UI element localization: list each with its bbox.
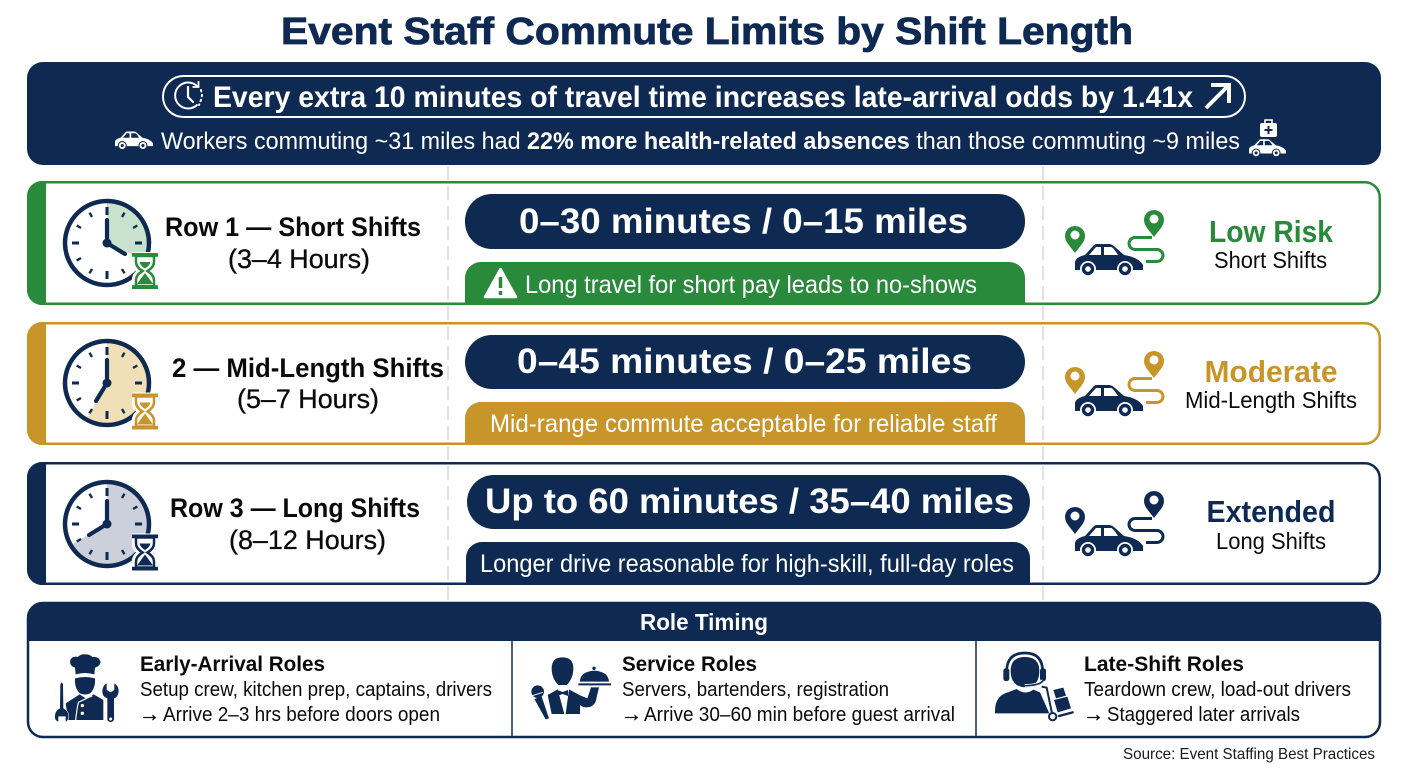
icon: clock with arrow [175, 81, 202, 109]
service roles text: Servers, bartenders, registration [622, 679, 889, 701]
panel: row 1 short shifts [27, 181, 1380, 305]
risk label [1209, 214, 1334, 273]
icon: warning [485, 269, 516, 297]
late-shift text: Teardown crew, load-out drivers [1084, 679, 1351, 701]
risk label: Mid-Length Shifts [1185, 387, 1357, 413]
panel: key statistics banner [27, 62, 1381, 165]
note tab: Long travel for short pay leads to no-shows [525, 271, 977, 299]
shift label: Row 1 — Short Shifts [165, 212, 421, 242]
shift label [165, 212, 421, 274]
panel: row 3 long shifts [27, 462, 1380, 585]
late-shift text [1083, 653, 1351, 726]
note tab [465, 262, 1025, 304]
risk label [1185, 354, 1357, 413]
late-shift text: Staggered later arrivals [1107, 704, 1300, 726]
shift label: (3–4 Hours) [228, 244, 370, 274]
early-arrival text: Arrive 2–3 hrs before doors open [163, 704, 440, 726]
icon: headset worker with hand truck [995, 653, 1073, 720]
service roles text: Arrive 30–60 min before guest arrival [644, 704, 955, 726]
risk label: Extended [1206, 494, 1336, 529]
shift label: 2 — Mid-Length Shifts [172, 353, 444, 383]
early-arrival text: → [139, 703, 160, 726]
commute limit pill [467, 475, 1030, 529]
callout: late-arrival odds: Every extra 10 minutes of travel time increases late-arrival odds by 1.41x [213, 81, 1193, 114]
shift label [172, 353, 444, 414]
icon: up arrow [1206, 85, 1229, 108]
icon: clock 4 hours [65, 201, 158, 289]
service roles text [621, 653, 955, 726]
commute limit pill: Up to 60 minutes / 35–40 miles [485, 482, 1014, 521]
icon: server with cloche and microphone [531, 657, 611, 719]
note tab [466, 542, 1030, 584]
early-arrival text: Setup crew, kitchen prep, captains, drivers [140, 679, 492, 701]
note tab [465, 402, 1025, 444]
late-shift text: Late-Shift Roles [1084, 653, 1244, 676]
early-arrival text [139, 653, 492, 726]
icon: route and car [1065, 210, 1164, 277]
early-arrival text: Early-Arrival Roles [140, 653, 325, 676]
icon: clock 7 hours [65, 341, 158, 430]
risk label: Short Shifts [1214, 247, 1327, 273]
commute limit pill [465, 194, 1025, 249]
note tab: Longer drive reasonable for high-skill, full-day roles [480, 550, 1014, 578]
risk label: Low Risk [1209, 214, 1334, 249]
panel: role timing [27, 602, 1381, 737]
icon: route and car [1065, 351, 1164, 418]
risk label [1206, 494, 1336, 554]
note tab: Mid-range commute acceptable for reliable staff [490, 410, 997, 438]
icon: car with medical bag [1249, 120, 1286, 157]
title: Event Staff Commute Limits by Shift Length [281, 11, 1133, 53]
commute limit pill: 0–30 minutes / 0–15 miles [519, 202, 968, 241]
commute limit pill [465, 335, 1025, 389]
risk label: Moderate [1204, 354, 1338, 389]
icon: route and car [1065, 491, 1164, 558]
panel: row 2 mid-length shifts [27, 322, 1380, 445]
health absences text: Workers commuting ~31 miles had 22% more health-related absences than those commuting ~9 miles [161, 128, 1240, 155]
shift label: (8–12 Hours) [229, 525, 386, 555]
shift label [170, 493, 420, 555]
icon: chef with wrenches [55, 654, 119, 722]
icon: clock 8 hours [65, 482, 158, 570]
source note: Source: Event Staffing Best Practices [1123, 746, 1375, 763]
icon: car [115, 132, 153, 150]
commute limit pill: 0–45 minutes / 0–25 miles [517, 342, 972, 381]
heading: Role Timing [640, 609, 768, 635]
risk label: Long Shifts [1216, 528, 1326, 554]
column guide lines [448, 166, 1043, 602]
service roles text: Service Roles [622, 653, 757, 676]
shift label: Row 3 — Long Shifts [170, 493, 420, 523]
late-shift text: → [1083, 703, 1104, 726]
shift label: (5–7 Hours) [237, 384, 379, 414]
service roles text: → [621, 703, 642, 726]
